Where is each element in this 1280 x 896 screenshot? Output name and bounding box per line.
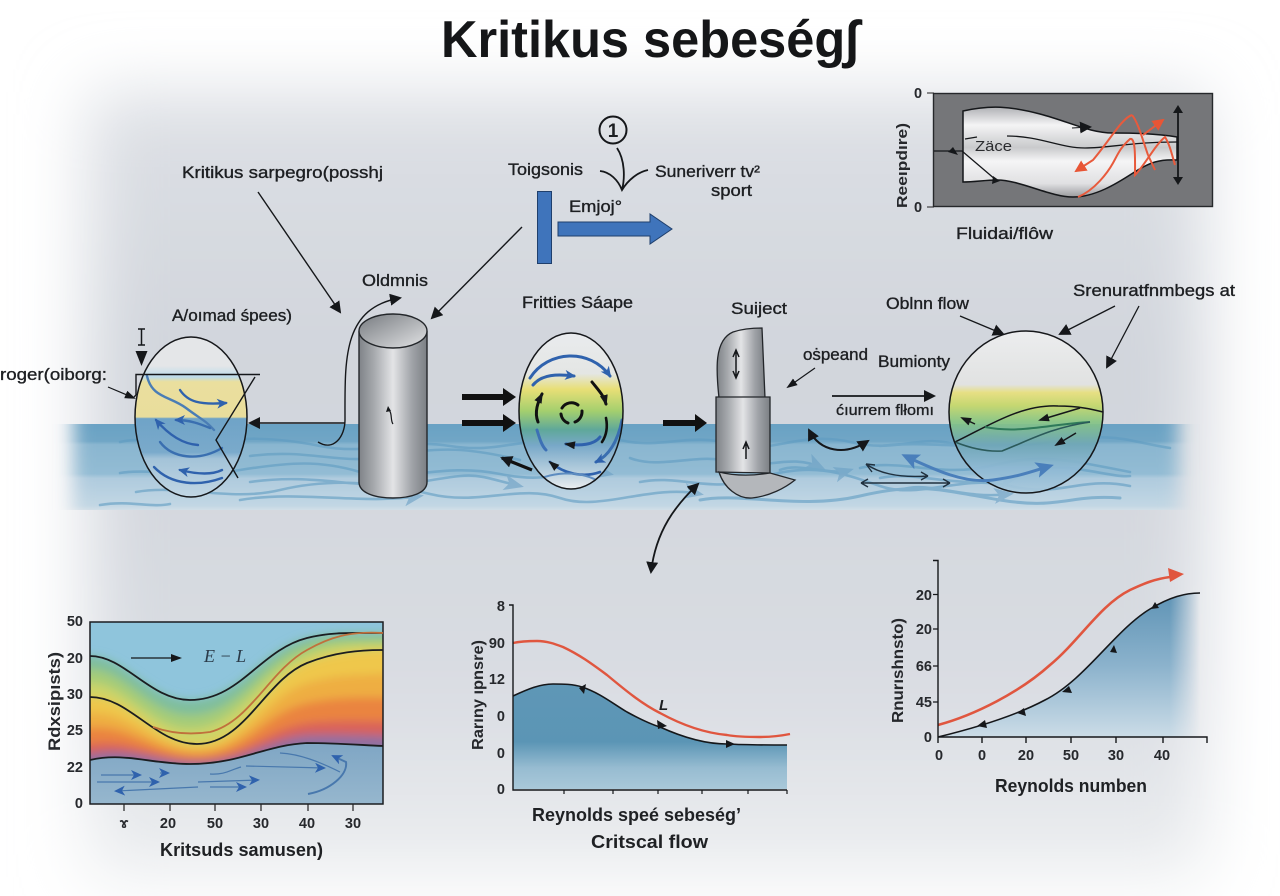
chart 1 axis labels: 50 [67,614,83,630]
arrow and formula: E − L [203,646,246,666]
label: Suneriverr: Suneriverr tv² [655,163,761,181]
chart 3 axis labels: 0 [978,748,986,764]
cylinder [359,314,427,498]
level marker [136,329,148,366]
arrow: obinn flow [960,316,1003,334]
label: Oldmnis: Oldmnis [362,272,428,290]
chart 3 axis labels: 40 [1154,748,1170,764]
caption: fluidai flow: Fluidai/flôw [956,225,1053,243]
arrow and formula [131,646,246,666]
chart 1 axis labels: 30 [345,816,361,832]
chart 3 axis labels: 45 [916,695,932,711]
chart 3 axis labels: 66 [916,659,932,675]
label: Obinn flow: Oblnn flow [886,295,969,313]
axis ticks: top-right: 0 [914,200,922,216]
chart 1 axis labels [67,614,361,832]
label: Suneriverr [655,163,761,200]
chart 2 axis labels: 12 [489,672,505,688]
red line [153,633,383,733]
chart 3 caption: Reynolds numben [995,775,1147,796]
arrow: vortex outflow [502,458,532,470]
label: Fritties Saape: Fritties Sáape [522,294,633,312]
curved arrow around cylinder [318,298,400,445]
panel: right ellipse [949,331,1103,493]
arrow: srenurat left [1060,306,1115,334]
chart 1 axis labels: ɤ [120,816,129,832]
arrow: to right ellipse [832,395,934,397]
chart 1 axis labels: 30 [253,816,269,832]
axis label: top-right: Reeıpdıre) [894,123,911,208]
label: Suject: Suiject [731,300,787,318]
label: A/oimad spees: A/oımad śpees) [172,307,292,325]
chart 3 y title: Rnurıshnsto) [890,618,907,723]
chart 3 axis labels: 50 [1063,748,1079,764]
chart 1 caption: Kritsuds samusen) [160,839,323,860]
chart 1 axis labels: 22 [67,760,83,776]
numbered marker: 1 [608,121,619,142]
chart 2 caption 2: Critscal flow [591,831,709,852]
arrow: inflow to body [663,414,707,432]
chart 1 y title: Rdxsipısts) [45,652,64,751]
axis ticks: top-right: 0 [914,86,922,102]
label: L: L [659,697,668,714]
label: Toigsonis: Toigsonis [508,161,583,179]
blue flow arrow [905,456,1050,481]
chart 1 axis labels: 30 [67,687,83,703]
panel: left ellipse [134,337,260,497]
label: Suneriverr: sport [711,182,752,200]
label: ospeand: oṡpeand [803,346,868,364]
arrow: inflow upper [462,388,516,406]
axis ticks: top-right [914,86,934,216]
numbered marker [600,116,626,144]
label: Bumionty: Bumionty [878,353,951,371]
chart 3 axis labels: 20 [1018,748,1034,764]
arrow: to body [788,368,815,387]
bluff body [716,328,795,498]
blue bar [538,192,552,264]
chart 1 axis labels: 25 [67,723,83,739]
chart 3 axis labels: 20 [916,622,932,638]
chart 3 axis labels: 0 [935,748,943,764]
arrow: inflow lower [462,414,516,432]
red curve [513,641,790,737]
title: Kritikus sebeség∫ [441,11,863,69]
chart 2 axis labels: 8 [497,599,505,615]
chart 2 axis labels: 0 [497,709,505,725]
arrow: to cylinder right [432,227,522,318]
label: Emjoj: Emjoj° [569,198,622,216]
chart 1 axis labels: 40 [299,816,315,832]
double curved arrow [809,430,868,450]
arrow: srenurat right [1107,306,1139,367]
water waves [100,435,1170,505]
flow streaks [97,753,346,794]
chart 2 axis labels: 0 [497,746,505,762]
chart 3 axis labels [916,588,1170,764]
label: current: ćıurrem flłomı [836,402,934,419]
blue flow arrows [147,376,226,483]
label: Kritikus sarpegro: Kritikus sarpegro(posshj [182,164,383,182]
chart: critical flow [509,605,790,794]
chart 3 axis labels: 20 [916,588,932,604]
chart 2 axis labels [489,599,505,798]
chart 1 axis labels: 20 [160,816,176,832]
curved arrow from marker [600,148,648,190]
chart: reynolds number [933,560,1207,743]
chart 1 axis labels: 50 [207,816,223,832]
chart 2 y title: Rarıny ıpnsre) [470,640,487,750]
label: Zace: Zäce [975,138,1012,155]
vortex arrows [526,356,622,486]
chart 2 caption 1: Reynolds speé sebeség’ [532,804,741,825]
chart 3 axis labels: 30 [1108,748,1124,764]
arrow: to cylinder left [258,192,340,312]
panel: vortex ellipse [519,333,623,489]
chart 2 axis labels: 0 [497,782,505,798]
chart 2 axis labels: 90 [489,636,505,652]
panel: top-right flow diagram [934,94,1212,206]
small flow arrows [861,464,950,487]
arrow: cylinder to ellipse [250,422,345,424]
blue arrow [558,214,672,244]
chart 1 axis labels: 0 [75,796,83,812]
chart 1 axis labels: 20 [67,651,83,667]
pointer arrow [108,387,134,398]
label: Srenurat: Srenuratfnmbegs at [1073,282,1235,300]
water band [74,424,1178,510]
chart: stream contour [89,621,384,805]
double arrow to chart [651,484,698,572]
chart 3 axis labels: 0 [924,730,932,746]
red turbulence [1076,115,1175,197]
label: roger: roger(oiborg: [0,366,107,384]
background haze [88,92,1206,877]
